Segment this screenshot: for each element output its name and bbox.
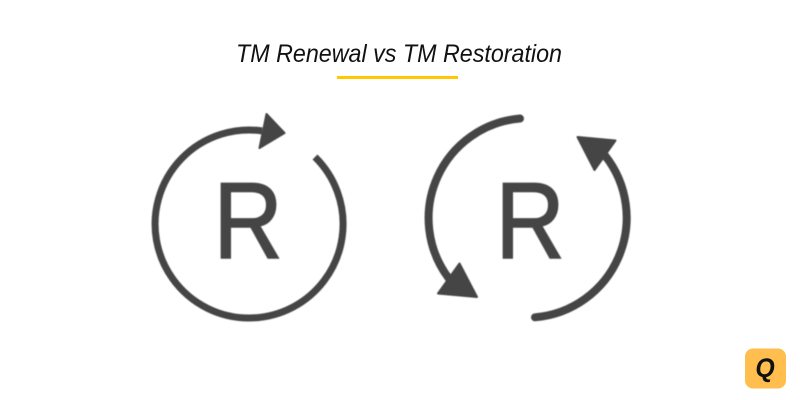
- icon: restoration, two circular arrows around R: R: [496, 159, 565, 281]
- title: TM Renewal vs TM Restoration: [236, 40, 562, 68]
- icon: restoration, two circular arrows around R: [429, 118, 627, 317]
- icon: renewal, single circular arrow around R: R: [214, 159, 283, 281]
- logo badge: [745, 348, 786, 388]
- title underline: [337, 76, 458, 79]
- icon: renewal, single circular arrow around R: [155, 114, 343, 318]
- logo badge: Q: [755, 354, 775, 383]
